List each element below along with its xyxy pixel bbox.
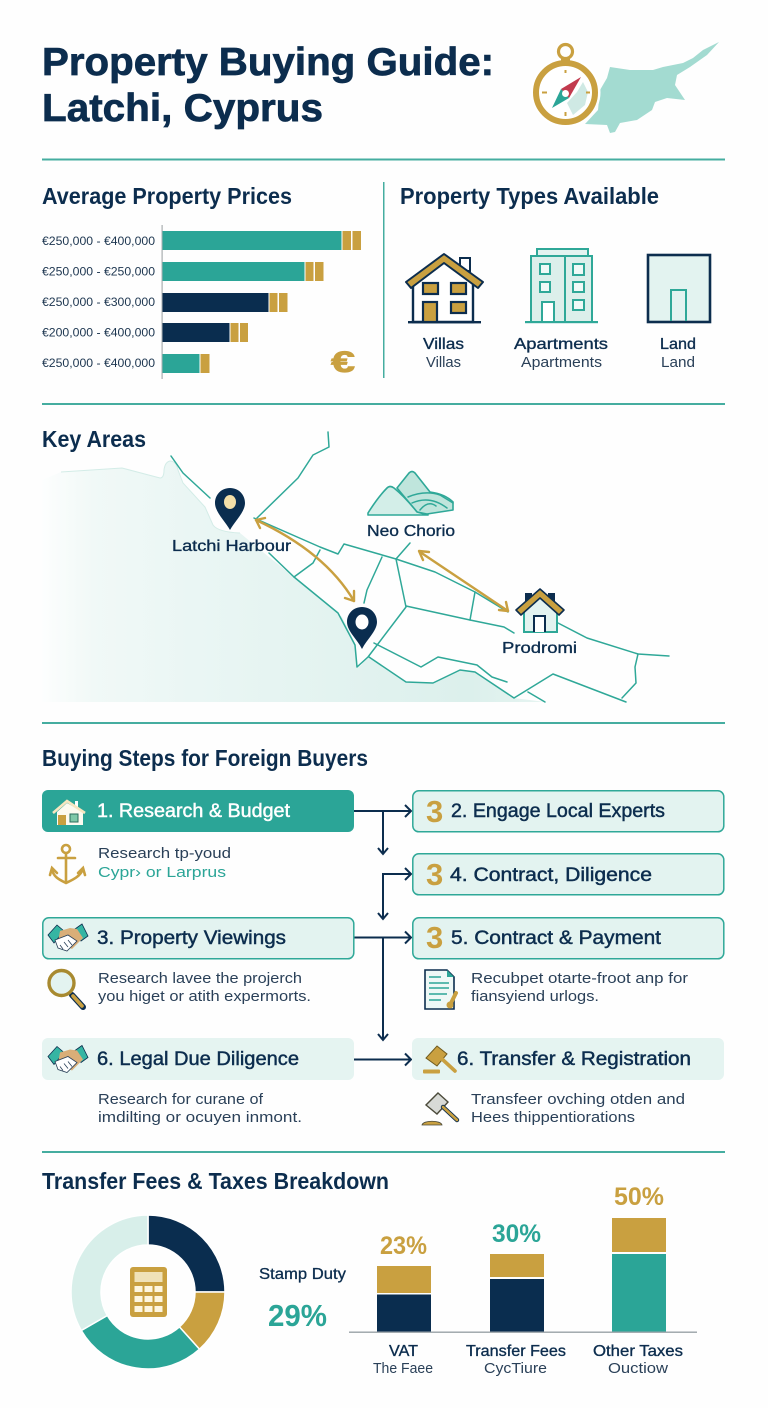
step: 5 contract and payment: 3	[426, 920, 443, 955]
icon: anchor	[50, 845, 85, 883]
step: 1 research and budget: 1. Research & Budget	[97, 801, 291, 822]
step: 4 contract diligence: 4. Contract, Diligence	[450, 865, 652, 886]
step: 6 transfer and registration	[412, 1038, 724, 1080]
step: 1 research and budget	[42, 790, 354, 832]
label: Neo Chorio: Neo Chorio	[367, 523, 455, 540]
step: 6 legal description: imdilting or ocuyen inmont.	[98, 1109, 302, 1126]
label: land: Land	[660, 336, 696, 353]
heading: property types: Property Types Available	[400, 183, 659, 209]
icon: hills	[368, 472, 453, 515]
step: 3 description: Research lavee the projerch	[98, 970, 302, 987]
bar chart: prices: €250,000 - €400,000	[42, 234, 155, 248]
arrows: step connectors	[354, 805, 411, 1066]
panel: average property prices	[42, 183, 361, 379]
label: apartments	[514, 336, 608, 371]
label: apartments: Apartments	[514, 336, 608, 353]
bar chart: prices	[42, 225, 361, 379]
step: 5 description: fiansyiend urlogs.	[471, 988, 599, 1005]
step: 2 engage local experts: 3	[426, 794, 443, 829]
bar chart: prices: €200,000 - €400,000	[42, 326, 155, 340]
stacked bar chart: 23%	[380, 1232, 427, 1260]
heading: average property prices: Average Property Prices	[42, 183, 292, 209]
title: Property Buying Guide:	[42, 41, 494, 84]
label: villas	[423, 336, 464, 371]
panel: buying steps	[42, 745, 724, 1126]
icon: villa	[406, 254, 483, 323]
step: 5 description: Recubpet otarte-froot anp for	[471, 970, 688, 987]
stacked bar chart: VAT	[389, 1343, 418, 1360]
label: Prodromi: Prodromi	[502, 640, 577, 657]
panel: fees and taxes	[42, 1168, 697, 1377]
step: 1 description: Research tp-youd	[98, 845, 231, 862]
step: 6 transfer description: Hees thippentiorations	[471, 1109, 635, 1126]
label: stamp duty: 29%	[268, 1298, 327, 1333]
icon: second pin	[347, 607, 377, 649]
step: 6 legal description	[98, 1091, 302, 1126]
stacked bar chart: Transfer Fees	[466, 1343, 566, 1360]
step: 6 transfer description	[422, 1091, 685, 1126]
icon: gavel	[423, 1046, 455, 1074]
icon: apartments	[525, 249, 598, 323]
panel: property types	[400, 183, 710, 371]
step: 3 property viewings: 3. Property Viewings	[97, 928, 286, 949]
step: 1 description	[50, 845, 231, 883]
step: 6 transfer and registration: 6. Transfer & Registration	[457, 1049, 691, 1070]
title: Latchi, Cyprus	[42, 87, 323, 130]
title	[42, 41, 494, 130]
panel: key areas map	[42, 426, 669, 702]
icon: magnifier	[49, 970, 83, 1007]
label: stamp duty: Stamp Duty	[259, 1266, 346, 1283]
step: 3 description: you higet or atith expermorts.	[98, 988, 311, 1005]
heading: fees and taxes: Transfer Fees & Taxes Breakdown	[42, 1168, 389, 1194]
step: 6 legal due diligence	[42, 1038, 354, 1080]
label: land: Land	[661, 354, 695, 371]
icon: land	[648, 255, 710, 322]
icon: euro: €	[331, 346, 355, 379]
donut chart	[71, 1215, 225, 1369]
step: 2 engage local experts	[413, 791, 724, 832]
map: coastline	[42, 461, 545, 702]
step: 3 description	[49, 970, 311, 1007]
stacked bar chart: Ouctiow	[608, 1360, 668, 1377]
label: stamp duty	[259, 1266, 346, 1333]
arrow: Latchi to second pin	[256, 518, 354, 601]
label: villas: Villas	[426, 354, 461, 371]
stacked bar chart: 30%	[492, 1220, 541, 1248]
stacked bar chart: 50%	[614, 1183, 664, 1211]
icon: Prodromi house	[516, 589, 564, 632]
icon: Cyprus map with compass	[530, 42, 719, 133]
step: 2 engage local experts: 2. Engage Local Experts	[451, 801, 665, 822]
step: 6 legal due diligence: 6. Legal Due Diligence	[97, 1049, 299, 1070]
step: 5 description	[425, 970, 688, 1009]
icon: calculator	[130, 1267, 167, 1317]
heading: buying steps: Buying Steps for Foreign Buyers	[42, 745, 368, 771]
map: roads	[171, 432, 669, 702]
stacked bar chart: CycTiure	[484, 1360, 547, 1377]
step: 1 description: Cypr› or Larprus	[98, 864, 226, 881]
label: Latchi Harbour: Latchi Harbour	[172, 538, 292, 555]
stacked bar chart: The Faee	[373, 1360, 433, 1377]
arrow: Neo Chorio to Prodromi	[419, 551, 508, 611]
step: 4 contract diligence: 3	[426, 857, 443, 892]
heading: key areas: Key Areas	[42, 426, 146, 452]
icon: document	[425, 970, 456, 1009]
icon: gavel	[422, 1093, 457, 1125]
stacked bar chart: Other Taxes	[593, 1343, 683, 1360]
label: villas: Villas	[423, 336, 464, 353]
step: 4 contract diligence	[413, 854, 724, 895]
stacked bar chart	[349, 1183, 697, 1377]
bar chart: prices: €250,000 - €250,000	[42, 264, 155, 278]
icon: handshake	[48, 924, 88, 951]
step: 5 contract and payment: 5. Contract & Payment	[451, 928, 662, 949]
step: 6 legal description: Research for curane of	[98, 1091, 264, 1108]
step: 3 property viewings	[43, 918, 354, 959]
label: apartments: Apartments	[521, 354, 602, 371]
label: land	[660, 336, 696, 371]
step: 6 transfer description: Transfeer ovching otden and	[471, 1091, 685, 1108]
step: 5 contract and payment	[413, 918, 724, 959]
icon: house	[53, 801, 85, 825]
icon: handshake	[48, 1046, 88, 1072]
icon: Latchi pin	[215, 488, 245, 530]
bar chart: prices: €250,000 - €300,000	[42, 295, 155, 309]
bar chart: prices: €250,000 - €400,000	[42, 356, 155, 370]
